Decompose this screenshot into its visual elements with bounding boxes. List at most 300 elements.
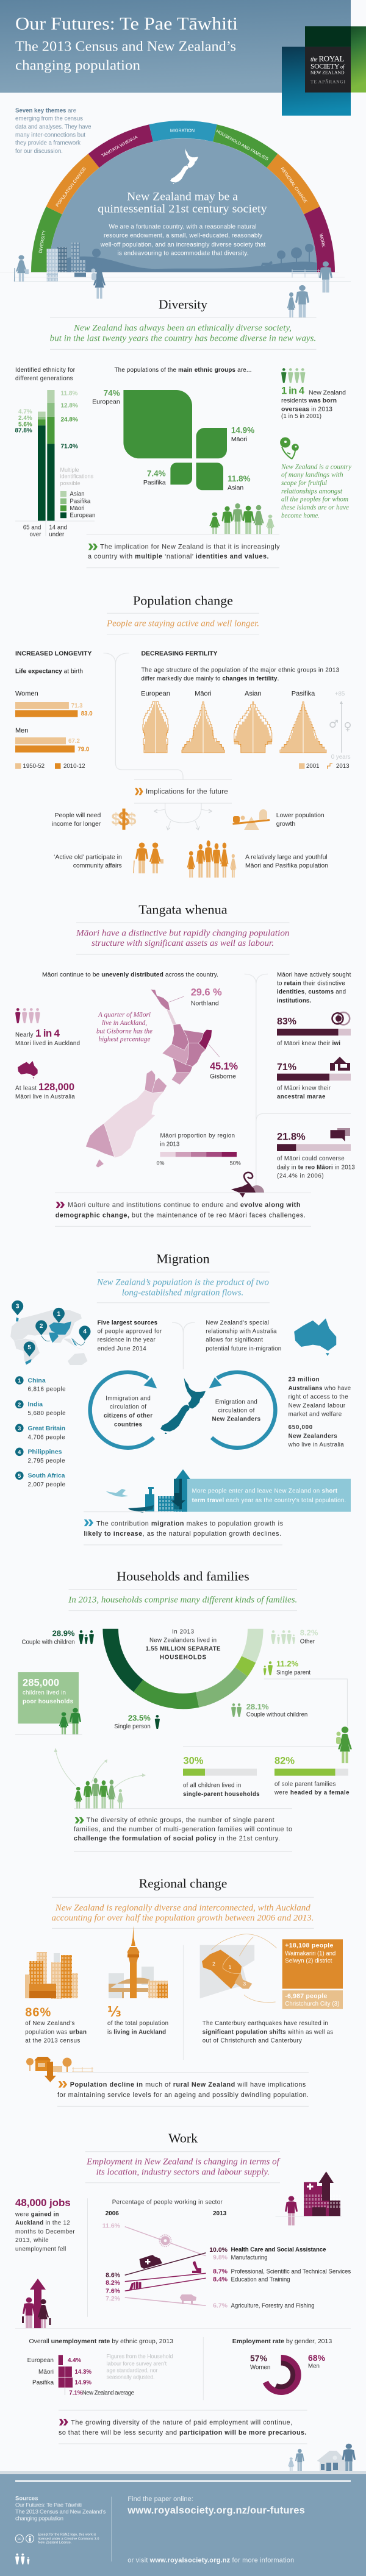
2013 values and sector names: Agriculture, Forestry and Fishing (231, 2303, 315, 2310)
diagram: immigration cycle (90, 1372, 157, 1448)
Great Britain: Great Britain (28, 1425, 65, 1432)
note: data source: age standardized, nor (106, 2368, 157, 2374)
text: Australia figures (288, 1377, 351, 1448)
slope chart: employment by sector: Percentage of people working in sector (112, 2199, 223, 2206)
2013 values and sector names (209, 2246, 351, 2310)
icon: older couple (134, 843, 163, 873)
label: single parent: Single parent (276, 1669, 310, 1676)
subheading (51, 1903, 314, 1923)
diagram: emigration cycle: New Zealanders (212, 1416, 260, 1423)
box: population loss: -6,987 people (285, 1992, 327, 1999)
icon: Auckland sky tower (109, 1926, 168, 1998)
logo: Royal Society of New Zealand: NEW ZEALAND (310, 70, 345, 76)
age pyramid: Pasifika (280, 690, 326, 753)
icon: adult and child (287, 285, 309, 318)
text: Canterbury earthquakes: out of Christchurch and Canterbury (203, 2037, 302, 2044)
stat: knew iwi (277, 1012, 351, 1047)
icon: dollar signs: $ (127, 810, 137, 828)
arch segment: population change: POPULATION CHANGE (54, 166, 87, 208)
subheading: long-established migration flows. (122, 1288, 243, 1298)
icon: dollar signs: $ (118, 807, 129, 830)
implication (84, 1519, 284, 1538)
icon: family with arrows (54, 1748, 146, 1809)
label: couple with children: 28.9% (52, 1628, 75, 1637)
chart heading: ethnicity by generation: Identified ethnicity for (15, 367, 76, 374)
legend: proportion scale: 0% (156, 1160, 165, 1166)
implication (57, 2081, 309, 2099)
legend: periods: 2010-12 (63, 763, 85, 770)
heading: Work (168, 2131, 198, 2146)
age pyramid: Asian: Asian (245, 690, 262, 698)
callout: children in poor households: 285,000 (23, 1678, 59, 1689)
India: 2 (18, 1402, 21, 1408)
arrows: implications (154, 803, 212, 830)
subheading: New Zealand’s population is the product of two (96, 1277, 269, 1287)
stat: 48,000 jobs: Auckland in the 12 (15, 2220, 70, 2227)
stat: te reo: daily in te reo Māori in 2013 (277, 1164, 355, 1171)
text: five largest sources: residence in the year (98, 1337, 156, 1344)
map: Canterbury: 1 (229, 1964, 232, 1970)
stat: Māori in Australia (15, 1061, 75, 1101)
arch body text (100, 224, 266, 257)
quote: many landings: New Zealand is a country (281, 463, 352, 470)
stat: knew marae: of Māori knew their (277, 1085, 331, 1091)
proportional chart: main ethnic groups: European (92, 398, 120, 405)
stat: 86% urban (25, 2006, 87, 2044)
2013 values and sector names: Manufacturing (231, 2254, 267, 2261)
panel: employment by gender (232, 2338, 332, 2392)
subtitle: changing population (15, 57, 140, 73)
box: population loss: Christchurch City (3) (285, 2001, 339, 2007)
bar chart: life expectancy: 71.3 (71, 703, 83, 709)
stat: te reo (277, 1128, 355, 1180)
world map with numbered pins (10, 1300, 91, 1365)
quote: many landings: scope for fruitful (281, 480, 327, 487)
callout: a quarter of Māori: A quarter of Māori (98, 1012, 151, 1019)
quote: many landings: relationships amongst (281, 488, 343, 495)
quote: many landings: become home. (281, 512, 320, 519)
map: Canterbury: 3 (243, 1981, 246, 1987)
stat: 1 in 4 in Auckland: Nearly (15, 1032, 34, 1038)
stacked bar chart: ethnicity by generation: 4.7% (18, 408, 32, 415)
stat: female sole parents (274, 1755, 350, 1796)
stat: 86% urban: population was urban (25, 2029, 87, 2035)
subtitle: The 2013 Census and New Zealand’s (15, 38, 236, 54)
stat: knew marae: ancestral marae (277, 1094, 326, 1101)
2006 values (102, 2223, 121, 2302)
stat: Māori in Australia: 128,000 (38, 1082, 74, 1093)
stat: single parent households: of all children lived in (183, 1783, 241, 1789)
panel: decreasing fertility: DECREASING FERTILITY (142, 650, 217, 657)
2013 values and sector names: 10.0% (209, 2246, 228, 2254)
arch heading: New Zealand may be a (127, 190, 239, 203)
China: 6,816 people (28, 1386, 66, 1393)
implication (59, 2419, 306, 2436)
heading: Tangata whenua (138, 902, 228, 917)
implication: likely to increase, as the natural population growth declines. (84, 1530, 281, 1538)
chart heading: main ethnic groups: The populations of the main ethnic groups are... (115, 367, 251, 374)
age pyramid: Pasifika: Pasifika (292, 690, 315, 698)
India: 5,680 people (28, 1410, 66, 1417)
box: population loss (282, 1990, 343, 2009)
panel: retaining identity: identities, customs and (277, 989, 346, 996)
callout: children in poor households: children lived in (23, 1690, 66, 1697)
diagram: immigration cycle: circulation of (110, 1404, 146, 1411)
links: Find the paper online: (127, 2496, 193, 2503)
quote: many landings (281, 463, 352, 519)
label: single person: Single person (114, 1723, 151, 1730)
licence icons and text: New Zealand License. (38, 2541, 71, 2545)
stat: female sole parents: 82% (274, 1755, 295, 1766)
implication: so that there will be less security and participation will be more precarious. (59, 2429, 306, 2436)
icon: seesaw (233, 809, 270, 830)
Great Britain: 4,706 people (28, 1434, 65, 1441)
text: Canterbury earthquakes: The Canterbury earthquakes have resulted in (203, 2020, 328, 2027)
sources: Our Futures: Te Pae Tāwhiti (15, 2502, 82, 2509)
2013 values and sector names: 9.8% (213, 2254, 228, 2261)
subheading: its location, industry sectors and labour supply. (96, 2168, 270, 2177)
bar chart: unemployment rate: Pasifika (32, 2380, 54, 2386)
South Africa: 2,007 people (28, 1481, 65, 1488)
bar chart: unemployment rate: European (27, 2357, 54, 2364)
stat: 48,000 jobs (15, 2197, 75, 2252)
licence icons and text: licensed under a Creative Commons 3.0 (38, 2537, 99, 2541)
implication: active old: community affairs (73, 862, 122, 869)
connector (245, 974, 351, 1188)
leader lines and region labels (170, 987, 238, 1080)
heading: Diversity (159, 297, 208, 312)
age axis: ♂ (329, 718, 339, 731)
2013 values and sector names: Professional, Scientific and Technical Services (231, 2269, 351, 2276)
proportional chart: main ethnic groups: 7.4% (147, 469, 166, 478)
list: top source countries (15, 1376, 66, 1488)
implication: young population: A relatively large and youthful (245, 853, 328, 860)
chart heading: ethnicity by generation (15, 367, 76, 382)
stat: single parent households (183, 1755, 260, 1798)
label: single person: 23.5% (128, 1713, 151, 1722)
implication: young population (245, 853, 328, 869)
bar chart: unemployment rate (27, 2355, 134, 2396)
icon: koru (280, 438, 299, 459)
stat: 1 in 4 born overseas: residents was born (281, 397, 337, 405)
label: single parent: 11.2% (276, 1659, 299, 1668)
stat: 86% urban: 86% (25, 2006, 51, 2019)
Philippines: 2,795 people (28, 1458, 65, 1464)
stat: one third in Auckland: ⅓ (107, 2004, 121, 2020)
panel: unemployment by ethnic group: Overall unemployment rate by ethnic group, 2013 (29, 2338, 173, 2345)
panel: employment by gender: 57% (250, 2353, 268, 2363)
donut chart: household types: New Zealanders lived in (149, 1637, 217, 1644)
subheading: People are staying active and well longer. (106, 619, 259, 628)
stat: Māori in Australia: Māori live in Australia (15, 1094, 75, 1101)
India (15, 1400, 66, 1417)
bar chart: unemployment rate: Māori (38, 2369, 54, 2376)
implication: income (52, 812, 101, 828)
stacked bar chart: ethnicity by generation: 5.6% (18, 421, 32, 428)
panel: unemployment by ethnic group (27, 2338, 173, 2396)
stat: 1 in 4 in Auckland (15, 1008, 80, 1047)
map heading: Māori continue to be unevenly distributed across the country. (42, 971, 218, 978)
arch body text: resource endowment, a small, well-educated, reasonably (104, 232, 262, 239)
bar chart: life expectancy: 79.0 (77, 746, 89, 753)
donut chart: household types: 1.55 MILLION SEPARATE (145, 1646, 221, 1653)
text: Australia figures: right of access to the (289, 1394, 348, 1400)
leader lines and region labels: 45.1% (210, 1061, 238, 1072)
legend: periods (15, 763, 85, 770)
implication: Population decline in much of rural New Zealand will have implications (70, 2081, 306, 2088)
sources: changing population (15, 2516, 63, 2522)
2013 values and sector names: 8.4% (213, 2276, 228, 2283)
text: Australia figures: who live in Australia (288, 1441, 344, 1448)
pin 5: 5 (27, 1344, 31, 1351)
icon: mother and child (336, 1726, 352, 1763)
South Africa: South Africa (28, 1472, 65, 1480)
subheading: Employment in New Zealand is changing in terms of (86, 2157, 281, 2167)
icon: city buildings (25, 1952, 78, 1999)
age pyramid: European: European (141, 690, 170, 698)
stacked bar chart: ethnicity by generation: 65 and (23, 525, 41, 531)
icon: three figures (15, 2553, 29, 2564)
note: multiple identifications: Multiple (60, 467, 79, 473)
label: couple without children (231, 1702, 307, 1719)
panel: increased longevity (15, 650, 93, 770)
Great Britain (15, 1424, 65, 1441)
intro text: data and analyses. They have (15, 124, 92, 130)
links: www.royalsociety.org.nz/our-futures (127, 2505, 305, 2516)
stat: 48,000 jobs: unemployment fell (15, 2246, 66, 2252)
subheading (96, 1277, 269, 1298)
arch heading (98, 190, 267, 215)
slope chart: employment by sector (102, 2199, 351, 2310)
bar chart: unemployment rate: 7.1% (69, 2390, 83, 2396)
diagram: emigration cycle: Emigration and (215, 1399, 257, 1405)
2006 values: 8.2% (106, 2279, 121, 2287)
age axis: +85 (335, 691, 345, 698)
stat: 1 in 4 born overseas (281, 368, 346, 420)
landscape: hills, city and trees (46, 243, 320, 282)
stat: 1 in 4 born overseas: (1 in 5 in 2001) (281, 413, 321, 420)
bar chart: life expectancy: Men (15, 727, 28, 734)
implication: growth: Lower population (276, 812, 325, 819)
pin 1: 1 (57, 1311, 61, 1318)
intro text (15, 107, 92, 155)
map: Canterbury: 2 (212, 1961, 215, 1967)
stacked bar chart: ethnicity by generation: 12.8% (61, 402, 78, 409)
icon: two children (59, 1708, 81, 1734)
label: couple without children: Couple without children (246, 1712, 307, 1719)
proportional chart: main ethnic groups: 11.8% (228, 474, 251, 483)
pin 2: 2 (40, 1323, 43, 1330)
section: households and families (15, 1569, 352, 1851)
intro text: emerging from the census (15, 116, 83, 122)
intro text: many inter-connections but (15, 132, 85, 138)
legend: census years (299, 763, 350, 770)
subheading (50, 324, 316, 343)
2006 values: 11.6% (102, 2223, 121, 2230)
quote: many landings: all the peoples for whom (281, 496, 348, 503)
panel: retaining identity: Māori have actively sought (277, 971, 351, 978)
stacked bar chart: ethnicity by generation: 14 and (49, 525, 67, 531)
stacked bar chart: ethnicity by generation: under (49, 531, 65, 538)
icon: books (129, 2282, 142, 2290)
callout: short term travel: More people enter and leave New Zealand on short (192, 1488, 338, 1494)
arch body text: We are a fortunate country, with a reasonable natural (109, 224, 256, 230)
proportional chart: main ethnic groups (92, 388, 254, 491)
implication (74, 1817, 292, 1842)
bar chart: unemployment rate: 14.9% (74, 2380, 92, 2386)
implication: for maintaining service levels for an ageing and possibly dwindling population. (57, 2092, 309, 2099)
stat: te reo: (24.4% in 2006) (277, 1173, 324, 1180)
note: data source: labour force survey aren’t (106, 2361, 167, 2367)
licence icons and text: cc (18, 2538, 21, 2541)
callout: a quarter of Māori (96, 1012, 152, 1043)
sources: Sources (15, 2496, 38, 2502)
panel: employment by gender: Employment rate by gender, 2013 (232, 2338, 332, 2345)
panel: retaining identity: to retain their distinctive (277, 981, 345, 987)
arch segment: tangata whenua: TANGATA WHENUA (101, 134, 138, 158)
stacked bar chart: ethnicity by generation: 87.8% (15, 427, 32, 434)
arch segment: migration: MIGRATION (170, 127, 195, 133)
stacked bar chart: ethnicity by generation: 11.8% (61, 390, 77, 397)
text: special relationship with Australia: New Zealand’s special (206, 1319, 269, 1326)
age pyramid: European (141, 690, 170, 753)
links: or visit www.royalsociety.org.nz for more information (127, 2556, 294, 2564)
text: five largest sources (98, 1319, 162, 1352)
header banner (0, 0, 351, 93)
label: couple without children: 28.1% (246, 1702, 269, 1711)
note: data source: Figures from the Household (106, 2353, 173, 2359)
licence icons and text (15, 2533, 99, 2545)
icon: dollar signs (111, 807, 137, 830)
diagram: immigration cycle: countries (114, 1421, 142, 1428)
chart heading: ethnicity by generation: different generations (15, 375, 73, 382)
arch segment: household and families (213, 124, 278, 168)
intro text: Seven key themes are (15, 107, 76, 114)
proportional chart: main ethnic groups: Māori (231, 436, 247, 443)
China (15, 1376, 66, 1393)
heading: Migration (156, 1252, 210, 1266)
bar chart: unemployment rate: 4.4% (68, 2357, 81, 2364)
legend: ethnic groups: Pasifika (70, 498, 91, 505)
legend: ethnic groups: European (70, 513, 95, 519)
donut chart: household types (102, 1629, 264, 1709)
panel: increased longevity: Life expectancy at birth (15, 668, 83, 675)
panel: employment by gender: Women (250, 2364, 270, 2371)
implication: income: People will need (55, 812, 101, 819)
stat: te reo: 21.8% (277, 1132, 306, 1143)
China: China (28, 1377, 46, 1384)
Philippines: 4 (18, 1449, 21, 1455)
text: Australia figures: New Zealand labour (289, 1402, 346, 1409)
section: population change (15, 594, 352, 878)
legend: proportion scale: Māori proportion by region (160, 1133, 235, 1140)
subheading (86, 2157, 281, 2177)
text: five largest sources: ended June 2014 (98, 1346, 146, 1352)
icon: person on the right (319, 261, 332, 293)
intro text: for our discussion. (15, 148, 63, 155)
age pyramid: Asian (234, 690, 272, 753)
implication: The growing diversity of the nature of paid employment will continue, (71, 2419, 292, 2426)
arch body text: is endeavouring to accommodate that diversity. (117, 250, 249, 257)
bar chart: unemployment rate: 14.3% (74, 2369, 92, 2376)
box: population gain: Selwyn (2) district (285, 1958, 332, 1965)
Philippines: Philippines (28, 1449, 62, 1456)
title: Our Futures: Te Pae Tāwhiti (15, 13, 238, 34)
2013 values and sector names: Health Care and Social Assistance (231, 2246, 326, 2253)
section: regional change (25, 1876, 343, 2106)
icon: rural decline (26, 2057, 93, 2082)
icon: hospital and nurse (276, 2171, 342, 2226)
text: Australia figures: 23 million (289, 1377, 320, 1383)
illustration: family and house above footer (288, 2444, 356, 2474)
text: five largest sources: of people approved for (98, 1329, 162, 1335)
legend: census years: 2001 (306, 763, 320, 770)
implication: families, and the number of multi-generation families will continue to (74, 1826, 292, 1833)
bar chart: unemployment rate: New Zealand average (82, 2390, 134, 2396)
label: other (271, 1628, 318, 1645)
subheading: structure with significant assets as well as labour. (92, 939, 274, 948)
arch body text: well-off population, and an increasingly diverse society that (100, 241, 266, 248)
footer (0, 2471, 366, 2576)
stat: knew marae (277, 1057, 351, 1101)
legend: ethnic groups: Māori (70, 505, 85, 512)
icon: large family (187, 840, 237, 878)
2013 values and sector names: 6.7% (213, 2302, 228, 2310)
icon: New Zealand map (170, 148, 198, 184)
panel: employment by gender: Men (308, 2363, 320, 2370)
stat: one third in Auckland: is living in Auckland (107, 2029, 166, 2035)
text: special relationship with Australia: relationship with Australia (206, 1329, 277, 1335)
donut chart: household types: HOUSEHOLDS (160, 1655, 207, 1661)
panel: decreasing fertility (141, 650, 352, 770)
implication: challenge the formulation of social policy in the 21st century. (74, 1835, 280, 1842)
arch segment: migration (149, 121, 217, 141)
intro text: they provide a framework (15, 140, 81, 147)
implications heading: Implications for the future (146, 789, 228, 796)
subheading: In 2013, households comprise many different kinds of families. (68, 1595, 297, 1605)
slope chart: employment by sector: 2013 (213, 2210, 227, 2217)
icon: gear (160, 2235, 171, 2246)
diagram: emigration cycle: circulation of (218, 1407, 255, 1414)
stat: 1 in 4 born overseas: New Zealand (309, 389, 346, 396)
South Africa (15, 1471, 65, 1488)
stat: one third in Auckland: of the total population (107, 2020, 168, 2027)
implication: The implication for New Zealand is that it is increasingly (100, 543, 280, 550)
proportional chart: main ethnic groups: Asian (228, 484, 243, 491)
proportional chart: main ethnic groups: 74% (104, 388, 120, 397)
logo: Royal Society of New Zealand: TE APĀRANGI (310, 79, 345, 85)
callout: children in poor households: poor households (23, 1698, 73, 1705)
stat: 86% urban: of New Zealand’s (25, 2020, 74, 2027)
arch segment: tangata whenua (88, 124, 153, 168)
logo: Royal Society of New Zealand: the ROYAL (310, 54, 345, 63)
implication: The diversity of ethnic groups, the number of single parent (87, 1817, 274, 1824)
licence icons and text: Except for the RSNZ logo, this work is (38, 2533, 96, 2537)
stat: 48,000 jobs: months to December (15, 2229, 75, 2235)
legend: proportion scale: in 2013 (160, 1141, 179, 1148)
text: Australia figures: Australians who have (289, 1385, 351, 1392)
text: Canterbury earthquakes: significant population shifts within as well as (203, 2029, 333, 2035)
stat: knew iwi: of Māori knew their iwi (277, 1040, 340, 1047)
note: data source (106, 2353, 173, 2380)
stat: 1 in 4 born overseas: overseas in 2013 (281, 405, 332, 413)
sources: The 2013 Census and New Zealand’s (15, 2509, 106, 2516)
arch segment: regional change (267, 154, 320, 215)
callout: a quarter of Māori: highest percentage (99, 1036, 150, 1043)
arch segment: diversity: DIVERSITY (37, 230, 47, 254)
label: single parent (264, 1659, 310, 1676)
stat: Māori in Australia: At least (15, 1085, 37, 1091)
